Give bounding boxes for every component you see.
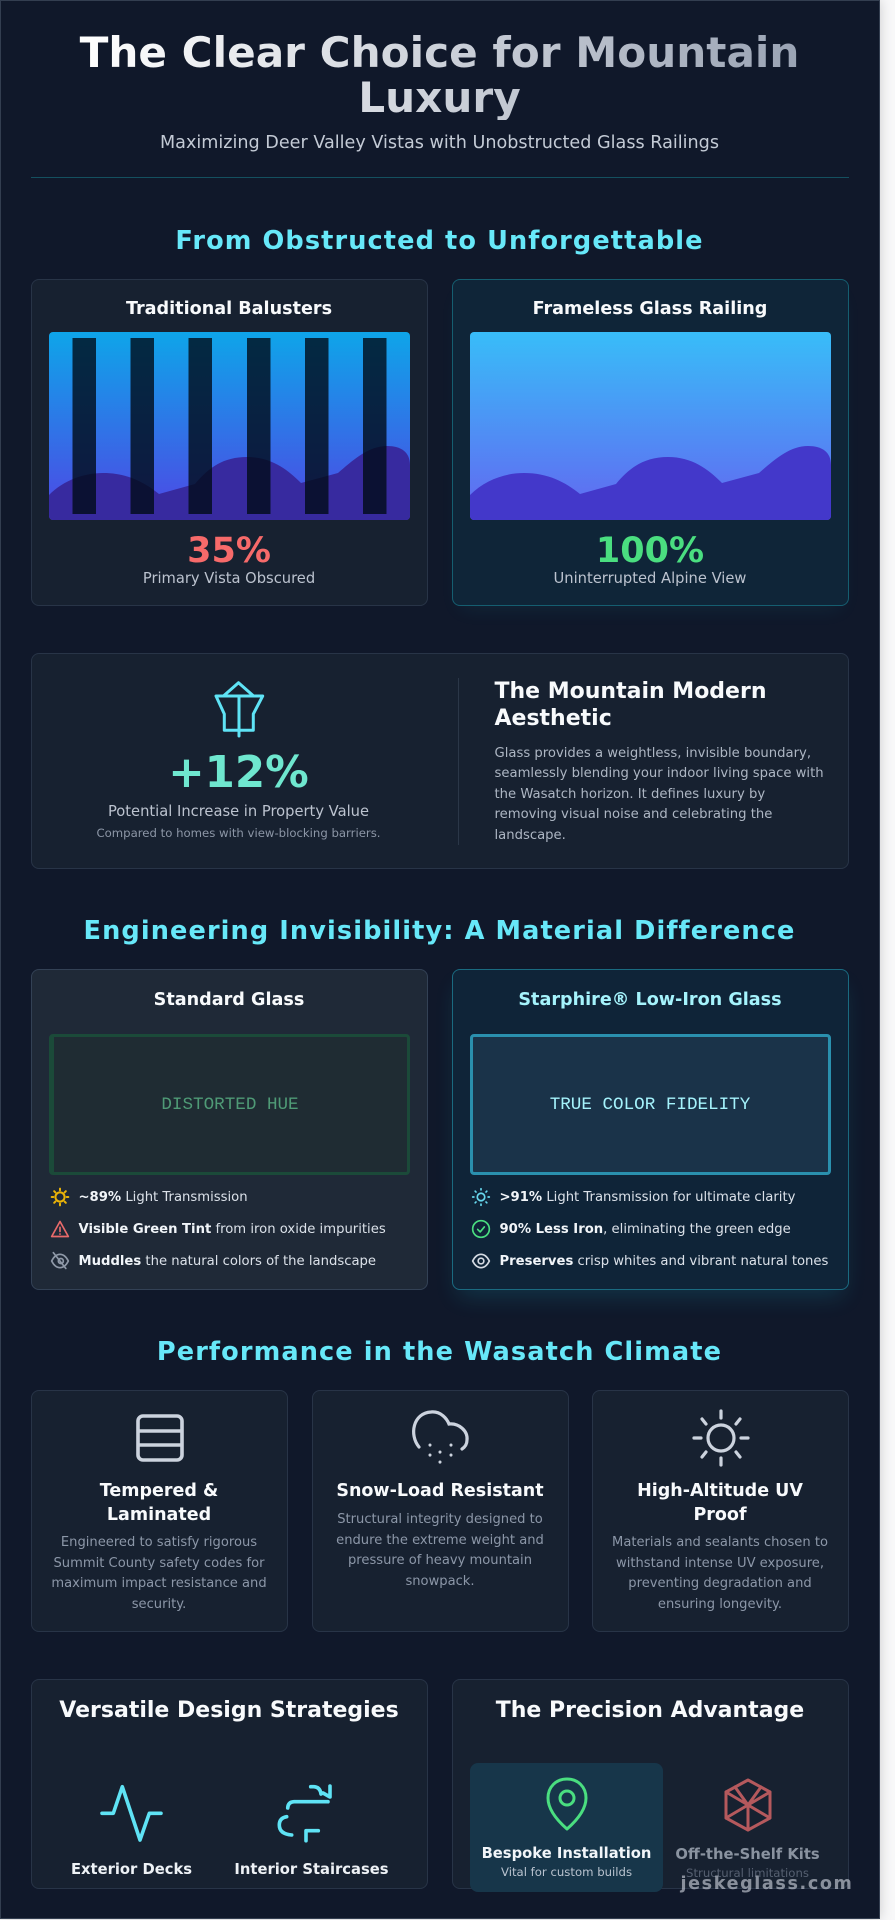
subtitle: Maximizing Deer Valley Vistas with Unobstructed Glass Railings	[160, 132, 719, 152]
note: vital for custom builds: Vital for custom builds	[501, 1865, 632, 1879]
icon: glass house	[214, 681, 264, 738]
label: primary vista obscured: Primary Vista Obscured	[143, 570, 315, 586]
heading: mountain modern aesthetic: The Mountain Modern Aesthetic	[494, 678, 766, 730]
paragraph: aesthetic description: Glass provides a weightless, invisible boundary, seamlessly blending your indoor living space with the Wasatch horizon. It defines luxury by removing visual noise and celebrating the landscape.	[494, 746, 824, 842]
glass sample: distorted hue	[48, 1034, 410, 1174]
icon: staircase	[278, 1784, 332, 1842]
icon: bright sun	[472, 1188, 490, 1206]
icon: sun	[692, 1409, 750, 1467]
fact: green tint: Visible Green Tint from iron oxide impurities	[78, 1222, 386, 1237]
highlight: bespoke installation	[470, 1763, 663, 1892]
panel: starphire low-iron glass	[452, 968, 848, 1290]
panel: snow-load resistant	[312, 1390, 568, 1632]
icon: snow cloud	[412, 1410, 469, 1464]
label: exterior decks: Exterior Decks	[71, 1860, 192, 1878]
heading: precision advantage: The Precision Advantage	[496, 1698, 804, 1722]
heading: UV proof	[637, 1481, 803, 1524]
title: The Clear Choice for Mountain Luxury	[80, 28, 799, 122]
panel: high-altitude UV proof	[592, 1390, 848, 1632]
panel: versatile design strategies	[30, 1679, 428, 1888]
icon: layered panes	[136, 1414, 184, 1462]
heading: versatile design strategies: Versatile Design Strategies	[59, 1698, 399, 1722]
fact: less iron: 90% Less Iron, eliminating the green edge	[500, 1222, 791, 1237]
heading: starphire glass: Starphire® Low-Iron Glass	[518, 990, 782, 1010]
watermark: jeskeglass.com	[680, 1874, 853, 1894]
heading: traditional balusters: Traditional Balusters	[126, 298, 332, 318]
icon: green check	[472, 1220, 490, 1238]
fact: muddles colors: Muddles the natural colors of the landscape	[78, 1254, 376, 1269]
stat: 100 percent: 100%	[596, 530, 704, 570]
note: structural limitations: Structural limitations	[686, 1866, 809, 1880]
section heading: performance: Performance in the Wasatch Climate	[157, 1337, 722, 1367]
panel: standard glass	[30, 968, 428, 1290]
stat: 35 percent: 35%	[187, 530, 271, 570]
icon: eye	[472, 1254, 490, 1268]
icon: yellow sun	[50, 1188, 70, 1206]
glass sample: true color fidelity	[470, 1034, 830, 1174]
icon: warning triangle	[50, 1220, 70, 1238]
heading: snow-load resistant: Snow-Load Resistant	[336, 1481, 544, 1501]
glass sample: distorted hue: DISTORTED HUE	[161, 1094, 299, 1114]
glass sample: true color fidelity: TRUE COLOR FIDELITY	[550, 1094, 750, 1114]
label: uninterrupted alpine view: Uninterrupted Alpine View	[554, 570, 746, 586]
label: off-the-shelf kits: Off-the-Shelf Kits	[675, 1846, 820, 1862]
stat: plus 12 percent: +12%	[168, 748, 309, 798]
label: potential increase: Potential Increase in Property Value	[108, 802, 369, 820]
text: uv materials: Materials and sealants chosen to withstand intense UV exposure, preventing degradation and ensuring longevity.	[612, 1535, 828, 1612]
section heading: obstructed to unforgettable: From Obstructed to Unforgettable	[175, 226, 704, 256]
panel: precision advantage	[452, 1679, 848, 1888]
label: interior staircases: Interior Staircases	[234, 1860, 389, 1878]
heading: frameless glass railing: Frameless Glass Railing	[533, 298, 767, 318]
illustration: view through balusters	[49, 332, 410, 520]
header divider	[30, 177, 848, 178]
section heading: engineering invisibility: Engineering Invisibility: A Material Difference	[84, 916, 795, 946]
panel: property value and aesthetic	[30, 652, 848, 868]
heading: standard glass: Standard Glass	[154, 990, 304, 1010]
label: bespoke installation: Bespoke Installation	[482, 1845, 651, 1862]
icon: activity line	[100, 1784, 163, 1842]
heading: UV proof: High-Altitude UV	[637, 1481, 803, 1501]
divider	[458, 678, 459, 844]
panel: traditional balusters	[30, 278, 428, 606]
text: safety codes: Engineered to satisfy rigorous Summit County safety codes for maximum impact resistance and security.	[51, 1535, 267, 1612]
illustration: open mountain view	[470, 332, 831, 520]
fact: light transmission: ~89% Light Transmission	[78, 1190, 248, 1205]
panel: frameless glass railing	[452, 278, 848, 606]
heading: tempered and laminated: Laminated	[107, 1504, 211, 1524]
note: compared to homes: Compared to homes with view-blocking barriers.	[96, 826, 380, 840]
heading: tempered and laminated: Tempered &	[100, 1481, 218, 1501]
panel: tempered and laminated	[30, 1390, 288, 1632]
fact: light transmission: >91% Light Transmission for ultimate clarity	[500, 1190, 795, 1205]
icon: broken cube	[724, 1778, 772, 1832]
heading: UV proof: Proof	[693, 1504, 747, 1524]
fact: preserves tones: Preserves crisp whites and vibrant natural tones	[500, 1254, 828, 1269]
heading: tempered and laminated	[100, 1481, 218, 1524]
icon: location pin	[546, 1778, 588, 1830]
text: structural integrity: Structural integrity designed to endure the extreme weight and pressure of heavy mountain snowpack.	[336, 1512, 544, 1588]
icon: crossed eye	[50, 1252, 70, 1270]
